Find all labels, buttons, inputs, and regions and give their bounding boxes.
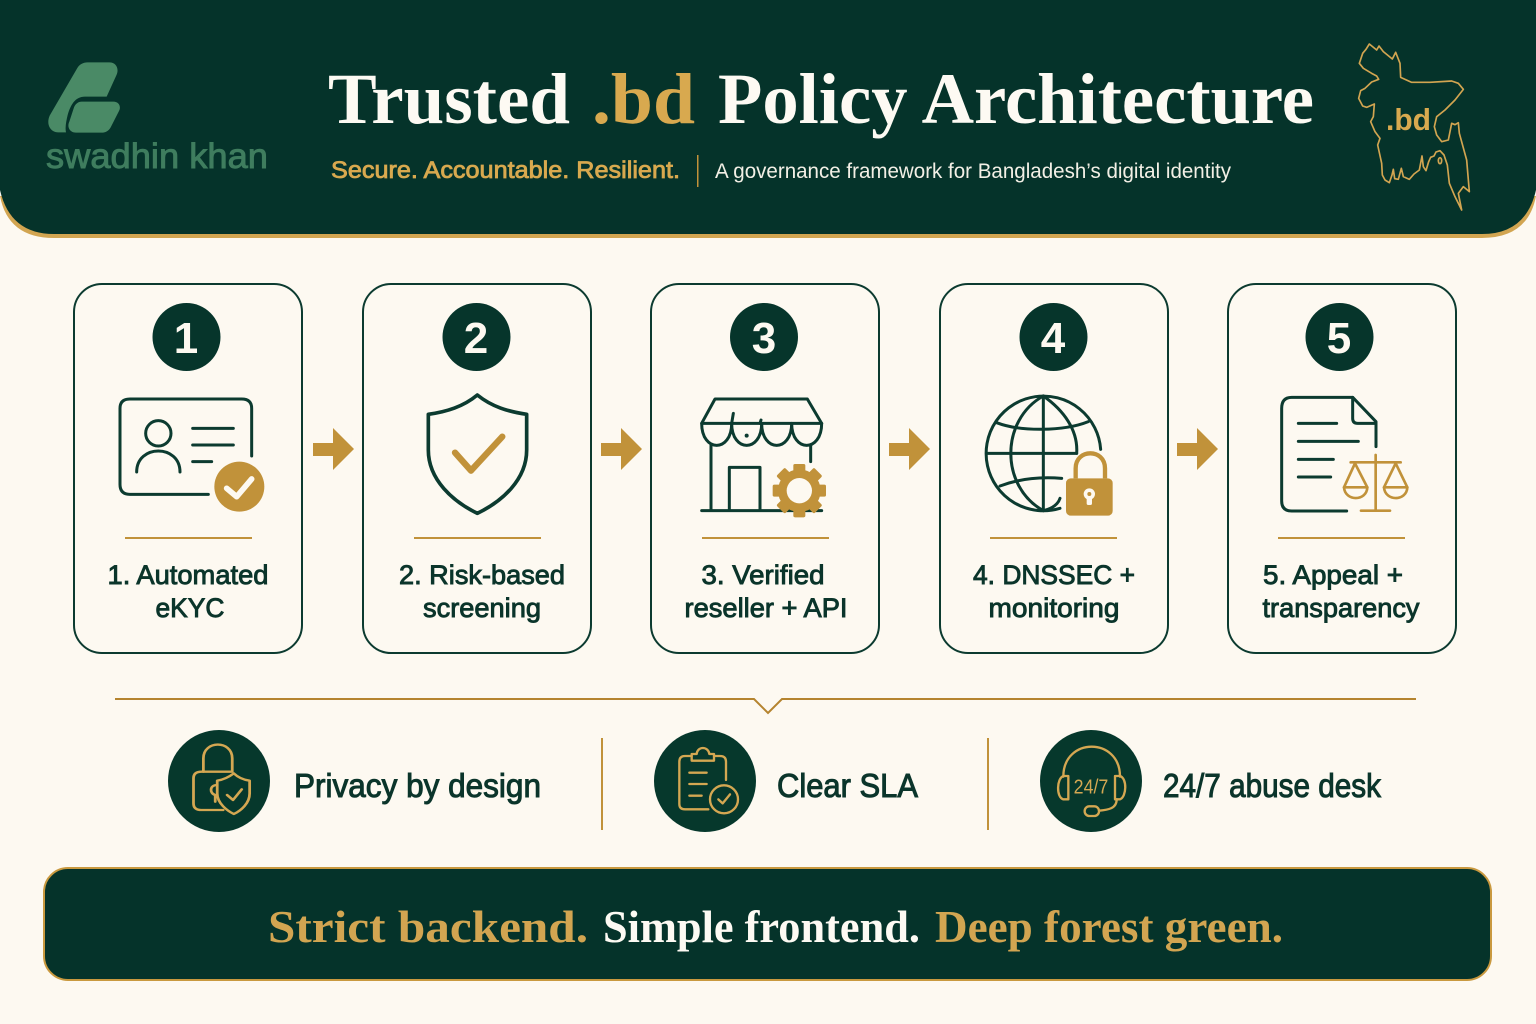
- panel: step 1 automated eKYC: [74, 284, 302, 653]
- tagline: Deep forest green.: [935, 901, 1283, 952]
- title: [328, 59, 1314, 139]
- badge 1: [152, 303, 220, 371]
- arrow 4: [1177, 428, 1218, 470]
- icon: headset 24/7: [1058, 747, 1125, 816]
- title: Trusted: [328, 59, 570, 139]
- label 3: reseller + API: [684, 593, 848, 623]
- icon: clipboard with check: [679, 748, 738, 813]
- tagline: Strict backend.: [268, 901, 588, 952]
- icon: ID card with check: [120, 399, 264, 512]
- arrow 1: [313, 428, 354, 470]
- icon: document with scales: [1282, 397, 1407, 511]
- bottom banner: [44, 868, 1491, 980]
- feature: 24/7 abuse desk: 24/7 abuse desk: [1163, 767, 1381, 804]
- icon: globe with padlock: [986, 396, 1113, 516]
- panel: step 5 appeal + transparency: [1228, 284, 1456, 653]
- icon: headset 24/7: 24/7: [1074, 776, 1108, 799]
- subtitle: [331, 155, 1231, 187]
- label 3: [684, 560, 848, 623]
- label 5: transparency: [1262, 593, 1420, 623]
- subtitle: A governance framework for Bangladesh’s digital identity: [715, 160, 1231, 183]
- tagline: [268, 901, 1283, 952]
- label 3: 3. Verified: [702, 560, 824, 590]
- title: .bd: [592, 59, 695, 139]
- icon: lock and shield: [193, 745, 250, 814]
- title: Policy Architecture: [718, 59, 1314, 139]
- header banner: [0, 0, 1536, 238]
- label 5: [1262, 560, 1420, 623]
- arrow 3: [889, 428, 930, 470]
- label 2: [399, 560, 565, 623]
- map of Bangladesh with .bd: [1359, 44, 1469, 210]
- icon: storefront with gear: [702, 399, 826, 517]
- badge 2: [442, 303, 510, 371]
- label 1: eKYC: [156, 593, 224, 623]
- connector line with notch: [115, 699, 1416, 713]
- logo: swadhin khan: [46, 62, 268, 176]
- badge 5: 5: [1327, 314, 1351, 363]
- panel: step 4 DNSSEC + monitoring: [940, 284, 1168, 653]
- label 5: 5. Appeal +: [1263, 560, 1403, 590]
- label 4: [973, 560, 1135, 623]
- feature: privacy by design: [168, 730, 541, 832]
- feature: privacy by design: Privacy by design: [294, 767, 541, 804]
- tagline: Simple frontend.: [603, 901, 920, 952]
- feature: 24/7 abuse desk: [1040, 730, 1381, 832]
- icon: shield with check: [428, 395, 527, 513]
- label 4: monitoring: [988, 593, 1120, 623]
- badge 3: [730, 303, 798, 371]
- feature: clear SLA: [654, 730, 918, 832]
- badge 5: [1306, 303, 1374, 371]
- panel: step 2 risk-based screening: [363, 284, 591, 653]
- arrow 2: [601, 428, 642, 470]
- panel: step 3 verified reseller + API: [651, 284, 879, 653]
- logo: swadhin khan: swadhin khan: [46, 137, 268, 176]
- feature: clear SLA: Clear SLA: [777, 767, 918, 804]
- subtitle: Secure. Accountable. Resilient.: [331, 157, 680, 184]
- map of Bangladesh with .bd: .bd: [1386, 102, 1431, 137]
- label 2: screening: [423, 593, 541, 623]
- label 4: 4. DNSSEC +: [973, 560, 1135, 590]
- badge 4: [1020, 303, 1088, 371]
- badge 2: 2: [464, 314, 488, 363]
- badge 1: 1: [174, 314, 198, 363]
- badge 3: 3: [752, 314, 776, 363]
- label 2: 2. Risk-based: [399, 560, 565, 590]
- label 1: [108, 560, 268, 623]
- label 1: 1. Automated: [108, 560, 268, 590]
- badge 4: 4: [1041, 314, 1066, 363]
